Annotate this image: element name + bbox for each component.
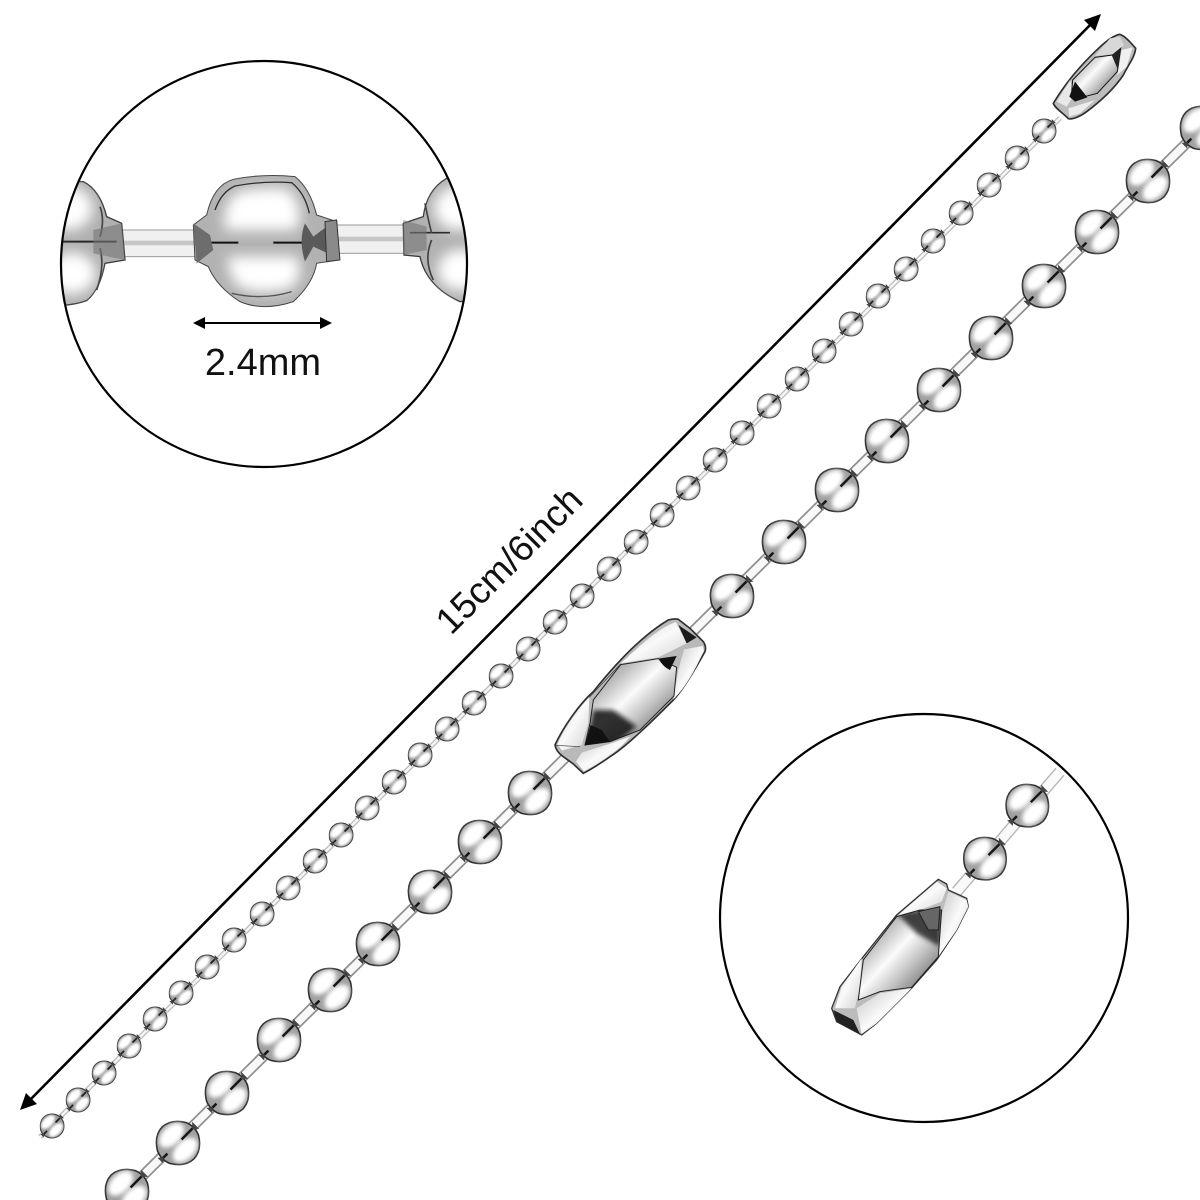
magnifier outline — [61, 61, 467, 467]
magnified clasp and beads — [832, 772, 1060, 1035]
panel: bead diameter magnifier — [44, 61, 486, 467]
magnified center bead — [193, 175, 340, 307]
short chain clasp — [1053, 34, 1136, 119]
short chain beads — [34, 113, 1062, 1144]
magnified bead upper — [994, 773, 1060, 839]
magnified clasp body — [832, 879, 968, 1035]
length label: 15cm/6inch — [428, 479, 590, 642]
clasp cavity — [585, 659, 677, 747]
magnified bead lower — [952, 826, 1018, 892]
short chain connector — [40, 118, 1060, 1137]
panel: clasp magnifier — [720, 714, 1128, 1122]
magnified right bead — [402, 178, 466, 302]
diameter label: 2.4mm — [205, 342, 321, 384]
long chain clasp — [555, 619, 706, 773]
magnified chain — [44, 175, 486, 307]
clasp magnifier outline — [720, 714, 1128, 1122]
diameter arrow — [193, 317, 332, 329]
connector rods — [957, 772, 1060, 892]
magnified rods — [117, 225, 410, 257]
magnified left bead — [62, 180, 126, 306]
clasp cavity — [858, 907, 943, 1000]
